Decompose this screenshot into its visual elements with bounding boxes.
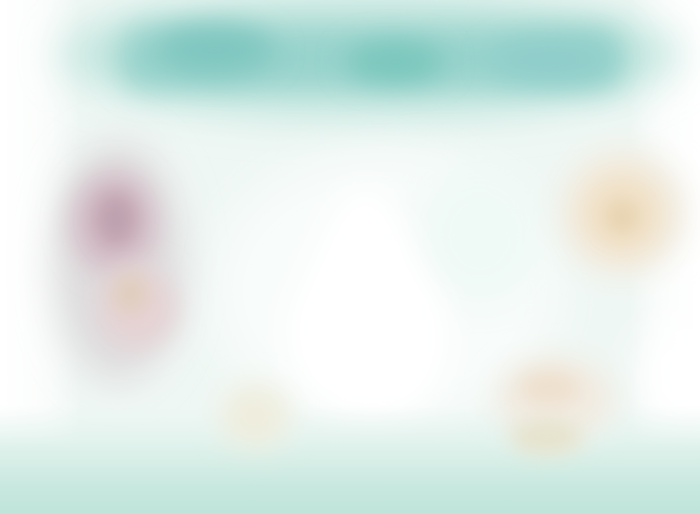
footer: bottom mint band xyxy=(0,405,700,514)
panel: top teal banner halo xyxy=(60,0,680,119)
panel: central pale area xyxy=(210,150,560,430)
icon: right orange circle xyxy=(556,146,688,278)
panel: top teal banner xyxy=(118,26,626,90)
icon: lower right beige blob xyxy=(495,356,615,455)
icon: left mauve figure xyxy=(54,142,182,382)
icon: lower centre beige blob xyxy=(221,384,289,448)
